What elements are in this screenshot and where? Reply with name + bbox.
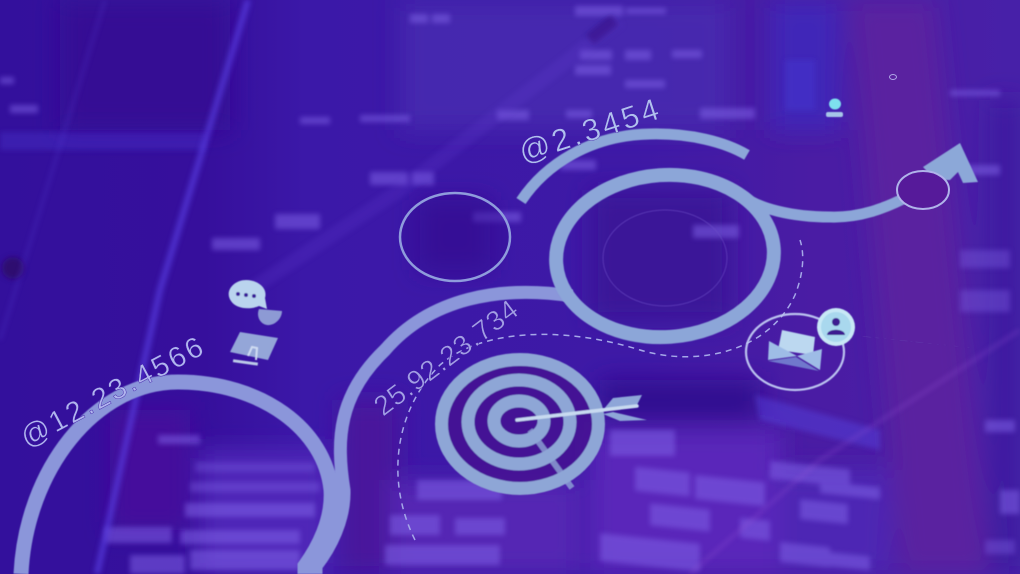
- icon: monitor: [230, 332, 278, 366]
- dashed orbit: [398, 240, 803, 540]
- label: 25.92.23.734 right: 25.92.23.734: [862, 320, 973, 351]
- blue streaks: [0, 20, 880, 450]
- upper central ring with tail: [551, 168, 905, 344]
- connector curve to upper ring: [316, 292, 572, 574]
- large lower-left ring with connecting curve: [21, 292, 572, 574]
- label: @2.3454: @2.3454: [514, 92, 663, 170]
- arrow head: [923, 143, 978, 183]
- icon: chat bubble: [229, 280, 282, 325]
- target icon: [435, 353, 647, 495]
- upper arc: [521, 134, 747, 201]
- label: 25.92.23.734 diagonal: 25.92.23.734: [368, 294, 524, 422]
- thin outlined circle: [400, 193, 510, 281]
- small ring top: [890, 74, 896, 80]
- label: @12.23.4566: @12.23.4566: [15, 331, 209, 454]
- icon: small user top: [826, 98, 843, 117]
- small outlined ellipse on tail: [897, 171, 949, 209]
- icon: user badge: [817, 308, 855, 346]
- icon: envelope in circle: [746, 314, 844, 390]
- target rings: [442, 360, 598, 488]
